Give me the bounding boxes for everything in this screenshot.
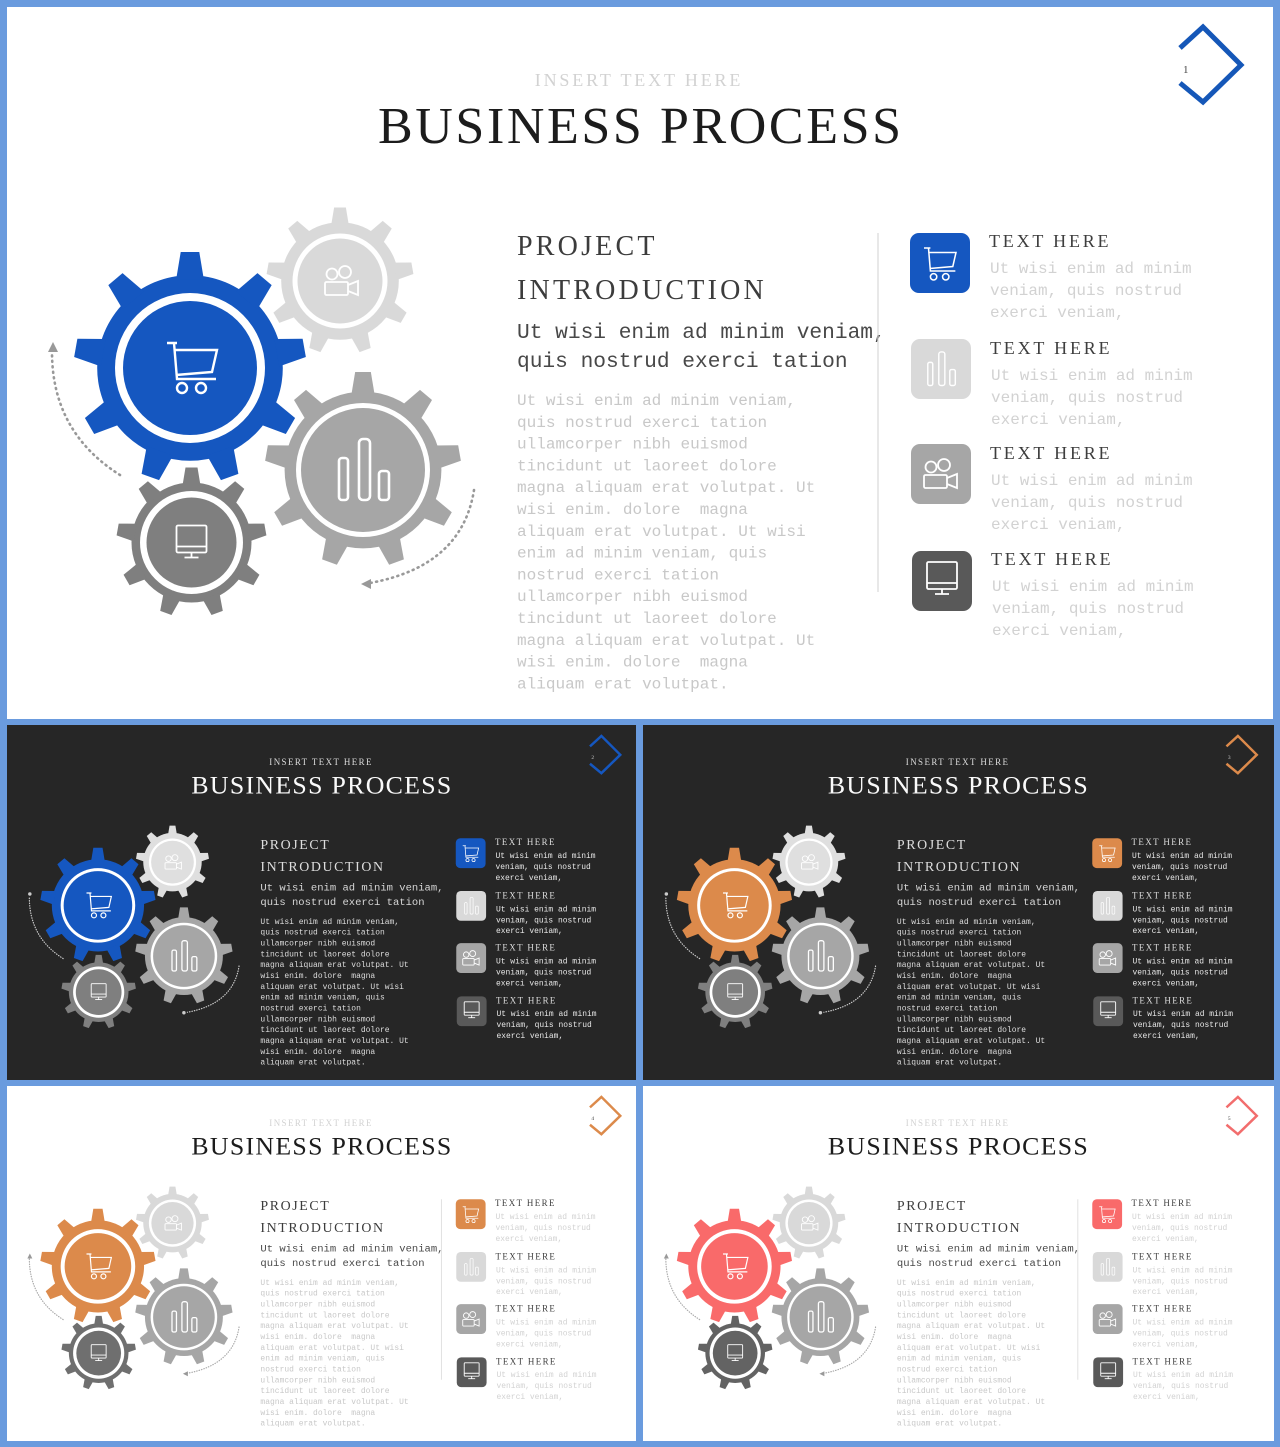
page number badge: [590, 736, 620, 773]
body text: ullamcorper nibh euismod: [517, 588, 748, 606]
list item 3: TEXT HERE: [1132, 1304, 1193, 1314]
list item 2: Ut wisi enim ad minim: [496, 1266, 596, 1275]
list item 1: Ut wisi enim ad minim: [496, 852, 596, 861]
body text: aliquam erat volutpat. Ut wisi: [260, 983, 404, 992]
list item 3: veniam, quis nostrud: [1133, 968, 1228, 977]
list item 2: Ut wisi enim ad minim: [496, 905, 596, 914]
gear: cart: [676, 1209, 792, 1323]
list item 4: TEXT HERE: [496, 995, 557, 1005]
list item 2: [456, 1251, 596, 1297]
list item 2: TEXT HERE: [496, 1251, 556, 1261]
body text: ullamcorper nibh euismod: [897, 1300, 1012, 1309]
body text: quis nostrud exerci tation: [897, 929, 1021, 938]
list item 1: [1092, 837, 1232, 883]
heading: project introduction: PROJECT: [897, 838, 967, 853]
gear: cart: [676, 848, 792, 962]
body text: enim ad minim veniam, quis: [897, 994, 1021, 1003]
list item 2: exerci veniam,: [1133, 1288, 1199, 1297]
list item 4: veniam, quis nostrud: [992, 600, 1184, 618]
list item 1: veniam, quis nostrud: [1132, 863, 1228, 872]
page number badge: 3: [1228, 755, 1231, 761]
body text: magna aliquam erat volutpat. Ut: [260, 1037, 409, 1046]
list item 2: veniam, quis nostrud: [991, 389, 1183, 407]
gear: monitor: [698, 1316, 773, 1390]
list item 1: veniam, quis nostrud: [1132, 1224, 1228, 1233]
arrow: left dotted: [48, 342, 120, 475]
list item 2: TEXT HERE: [1132, 1251, 1193, 1261]
body text: tincidunt ut laoreet dolore: [897, 1026, 1026, 1035]
list item 1: exerci veniam,: [1132, 1235, 1199, 1244]
list item 2: exerci veniam,: [496, 927, 563, 936]
list item 2: veniam, quis nostrud: [496, 916, 592, 925]
list item 4: exerci veniam,: [497, 1032, 563, 1041]
body text: wisi enim. dolore magna: [260, 1333, 375, 1342]
list item 4: TEXT HERE: [991, 549, 1113, 569]
list item 1: veniam, quis nostrud: [990, 282, 1182, 300]
body text: wisi enim. dolore magna: [897, 972, 1012, 981]
body text: enim ad minim veniam, quis: [260, 1355, 385, 1364]
body text: wisi enim. dolore magna: [517, 501, 748, 519]
title: BUSINESS PROCESS: [191, 771, 451, 800]
gear: chart: [135, 907, 233, 1004]
lead text: Ut wisi enim ad minim veniam,: [260, 882, 443, 894]
lead text: Ut wisi enim ad minim veniam,: [260, 1243, 443, 1255]
list item 2: [1093, 1251, 1233, 1297]
title: BUSINESS PROCESS: [378, 98, 901, 155]
list item 1: Ut wisi enim ad minim: [990, 260, 1192, 278]
body text: tincidunt ut laoreet dolore: [260, 1026, 390, 1035]
body text: tincidunt ut laoreet dolore: [897, 1387, 1026, 1396]
gear: camera: [266, 208, 414, 353]
heading: project introduction: INTRODUCTION: [260, 860, 385, 875]
body text: nostrud exerci tation: [517, 566, 719, 584]
gear: chart: [135, 1268, 233, 1365]
list item 4: Ut wisi enim ad minim: [1133, 1371, 1233, 1380]
gear: monitor: [61, 955, 136, 1029]
subtitle: INSERT TEXT HERE: [269, 1118, 373, 1128]
gear: camera: [136, 826, 209, 898]
body text: ullamcorper nibh euismod: [897, 1376, 1012, 1385]
list item 2: exerci veniam,: [496, 1288, 563, 1297]
lead text: quis nostrud exerci tation: [897, 897, 1061, 909]
body text: magna aliquam erat volutpat. Ut: [260, 961, 409, 970]
list item 2: veniam, quis nostrud: [1133, 916, 1228, 925]
list item 3: TEXT HERE: [496, 943, 556, 953]
gear: camera: [772, 826, 846, 898]
page number badge: 4: [591, 1116, 594, 1122]
arrow: left dotted: [27, 1253, 63, 1320]
body text: wisi enim. dolore magna: [897, 1409, 1012, 1418]
heading: project introduction: PROJECT: [260, 1199, 330, 1214]
body text: aliquam erat volutpat. Ut wisi: [517, 523, 806, 541]
list item 2: [911, 338, 1193, 429]
list item 4: Ut wisi enim ad minim: [1133, 1010, 1233, 1019]
subtitle: INSERT TEXT HERE: [269, 757, 373, 767]
body text: aliquam erat volutpat. Ut wisi: [897, 983, 1041, 992]
body text: magna aliquam erat volutpat. Ut: [897, 1037, 1045, 1046]
body text: tincidunt ut laoreet dolore: [897, 950, 1026, 959]
body text: nostrud exerci tation: [260, 1004, 361, 1013]
arrow: right dotted: [183, 1327, 239, 1376]
list item 4: exerci veniam,: [497, 1393, 563, 1402]
lead text: quis nostrud exerci tation: [897, 1258, 1061, 1270]
subtitle: INSERT TEXT HERE: [535, 70, 743, 90]
list item 3: Ut wisi enim ad minim: [991, 472, 1193, 490]
body text: magna aliquam erat volutpat. Ut: [260, 1398, 409, 1407]
heading: project introduction: PROJECT: [260, 838, 330, 853]
list item 4: [912, 549, 1194, 640]
page number badge: 1: [1183, 64, 1188, 76]
body text: quis nostrud exerci tation: [260, 1290, 385, 1299]
body text: ullamcorper nibh euismod: [260, 1376, 375, 1385]
body text: Ut wisi enim ad minim veniam,: [897, 1279, 1036, 1288]
list item 3: veniam, quis nostrud: [496, 1329, 592, 1338]
list item 4: exerci veniam,: [1133, 1032, 1200, 1041]
list item 1: TEXT HERE: [989, 231, 1111, 251]
body text: wisi enim. dolore magna: [897, 1048, 1012, 1057]
gear: camera: [772, 1187, 846, 1259]
heading: project introduction: INTRODUCTION: [517, 275, 767, 306]
list item 1: [910, 231, 1192, 322]
gear: cart: [40, 1209, 156, 1323]
list item 1: Ut wisi enim ad minim: [1132, 1213, 1232, 1222]
body text: ullamcorper nibh euismod: [260, 939, 375, 948]
gear: chart: [771, 1268, 869, 1365]
heading: project introduction: PROJECT: [897, 1199, 967, 1214]
list item 1: TEXT HERE: [495, 837, 556, 847]
page number badge: [1180, 27, 1241, 102]
lead text: Ut wisi enim ad minim veniam,: [897, 1243, 1080, 1255]
list item 3: veniam, quis nostrud: [1133, 1329, 1228, 1338]
body text: wisi enim. dolore magna: [517, 654, 748, 672]
body text: tincidunt ut laoreet dolore: [260, 950, 390, 959]
title: BUSINESS PROCESS: [828, 771, 1088, 800]
title: BUSINESS PROCESS: [191, 1132, 451, 1161]
body text: aliquam erat volutpat.: [897, 1059, 1002, 1068]
list item 4: veniam, quis nostrud: [497, 1021, 592, 1030]
heading: project introduction: INTRODUCTION: [260, 1221, 385, 1236]
list item 2: veniam, quis nostrud: [1133, 1277, 1228, 1286]
page number badge: 5: [1228, 1116, 1231, 1122]
list item 3: Ut wisi enim ad minim: [496, 958, 596, 967]
list item 4: [1093, 995, 1233, 1041]
list item 2: [1093, 890, 1233, 936]
list item 1: exerci veniam,: [1132, 874, 1199, 883]
body text: tincidunt ut laoreet dolore: [897, 1311, 1026, 1320]
list item 2: TEXT HERE: [1132, 890, 1193, 900]
arrow: left dotted: [665, 892, 700, 959]
list item 3: veniam, quis nostrud: [496, 968, 592, 977]
list item 2: exerci veniam,: [991, 411, 1125, 429]
panel: slide 4 light orange: [7, 1086, 636, 1441]
body text: ullamcorper nibh euismod: [260, 1300, 375, 1309]
list item 1: Ut wisi enim ad minim: [496, 1213, 596, 1222]
list item 3: Ut wisi enim ad minim: [1133, 958, 1233, 967]
body text: magna aliquam erat volutpat. Ut: [897, 1398, 1045, 1407]
page number badge: [1226, 736, 1257, 773]
list item 3: exerci veniam,: [1133, 979, 1199, 988]
body text: ullamcorper nibh euismod: [897, 1015, 1012, 1024]
gear: monitor: [61, 1316, 136, 1390]
page number badge: 2: [591, 755, 594, 761]
gear: camera: [136, 1187, 209, 1259]
body text: tincidunt ut laoreet dolore: [260, 1311, 390, 1320]
body text: aliquam erat volutpat.: [260, 1420, 366, 1429]
body text: Ut wisi enim ad minim veniam,: [897, 918, 1036, 927]
heading: project introduction: INTRODUCTION: [897, 860, 1021, 875]
list item 4: TEXT HERE: [1133, 995, 1193, 1005]
body text: nostrud exerci tation: [897, 1365, 998, 1374]
body text: wisi enim. dolore magna: [260, 1409, 375, 1418]
gear: chart: [264, 372, 462, 566]
list item 2: TEXT HERE: [990, 338, 1112, 358]
lead text: quis nostrud exerci tation: [260, 1258, 425, 1270]
title: BUSINESS PROCESS: [828, 1132, 1088, 1161]
body text: magna aliquam erat volutpat. Ut: [517, 632, 815, 650]
list item 2: veniam, quis nostrud: [496, 1277, 592, 1286]
body text: Ut wisi enim ad minim veniam,: [517, 392, 796, 410]
body text: nostrud exerci tation: [260, 1365, 361, 1374]
arrow: right dotted: [361, 490, 474, 589]
body text: tincidunt ut laoreet dolore: [260, 1387, 390, 1396]
list item 3: exerci veniam,: [496, 979, 563, 988]
list item 3: TEXT HERE: [1132, 943, 1193, 953]
arrow: left dotted: [28, 892, 63, 959]
body text: tincidunt ut laoreet dolore: [517, 610, 777, 628]
page number badge: [1226, 1097, 1257, 1134]
list item 4: Ut wisi enim ad minim: [992, 578, 1194, 596]
lead text: quis nostrud exerci tation: [260, 897, 425, 909]
gear: cart: [40, 848, 156, 962]
list item 3: Ut wisi enim ad minim: [1133, 1319, 1233, 1328]
heading: project introduction: INTRODUCTION: [897, 1221, 1021, 1236]
body text: aliquam erat volutpat.: [897, 1420, 1002, 1429]
list item 3: exerci veniam,: [991, 516, 1125, 534]
subtitle: INSERT TEXT HERE: [906, 1118, 1009, 1128]
body text: wisi enim. dolore magna: [260, 1048, 375, 1057]
list item 4: exerci veniam,: [992, 622, 1126, 640]
list item 3: [1093, 943, 1233, 988]
body text: enim ad minim veniam, quis: [897, 1355, 1021, 1364]
list item 3: exerci veniam,: [496, 1340, 563, 1349]
list item 4: TEXT HERE: [1133, 1356, 1193, 1366]
heading: project introduction: PROJECT: [517, 231, 658, 262]
list item 4: TEXT HERE: [496, 1356, 557, 1366]
list item 1: veniam, quis nostrud: [496, 863, 591, 872]
body text: ullamcorper nibh euismod: [517, 436, 748, 454]
panel: slide 2 dark blue: [7, 725, 636, 1080]
body text: nostrud exerci tation: [897, 1004, 998, 1013]
list item 4: veniam, quis nostrud: [497, 1382, 592, 1391]
body text: Ut wisi enim ad minim veniam,: [260, 918, 399, 927]
list item 1: TEXT HERE: [1132, 837, 1192, 847]
gear: chart: [771, 907, 869, 1004]
list item 3: [1093, 1304, 1233, 1349]
lead text: Ut wisi enim ad minim veniam,: [517, 321, 886, 345]
body text: quis nostrud exerci tation: [517, 414, 767, 432]
list item 3: TEXT HERE: [496, 1304, 556, 1314]
body text: tincidunt ut laoreet dolore: [517, 457, 777, 475]
body text: ullamcorper nibh euismod: [897, 939, 1012, 948]
gear: monitor: [116, 468, 267, 616]
list item 3: [911, 443, 1193, 534]
body text: magna aliquam erat volutpat. Ut: [260, 1322, 409, 1331]
body text: aliquam erat volutpat. Ut wisi: [897, 1344, 1041, 1353]
gear: cart: [73, 252, 307, 482]
list item 1: [1092, 1198, 1232, 1244]
list item 1: [456, 1198, 596, 1244]
body text: magna aliquam erat volutpat. Ut: [517, 479, 815, 497]
body text: enim ad minim veniam, quis: [260, 994, 385, 1003]
list item 4: [457, 995, 597, 1041]
body text: magna aliquam erat volutpat. Ut: [897, 961, 1045, 970]
list item 4: [457, 1356, 597, 1402]
page number badge: [590, 1097, 620, 1134]
list item 2: TEXT HERE: [496, 890, 556, 900]
body text: enim ad minim veniam, quis: [517, 545, 767, 563]
body text: Ut wisi enim ad minim veniam,: [260, 1279, 399, 1288]
list item 3: exerci veniam,: [1133, 1340, 1199, 1349]
list item 1: exerci veniam,: [990, 304, 1124, 322]
arrow: right dotted: [819, 1327, 876, 1376]
list item 4: exerci veniam,: [1133, 1393, 1200, 1402]
list item 1: TEXT HERE: [495, 1198, 556, 1208]
list item 4: veniam, quis nostrud: [1133, 1382, 1229, 1391]
list item 4: [1093, 1356, 1233, 1402]
list item 1: exerci veniam,: [496, 1235, 562, 1244]
body text: ullamcorper nibh euismod: [260, 1015, 375, 1024]
lead text: quis nostrud exerci tation: [517, 350, 848, 374]
list item 4: Ut wisi enim ad minim: [497, 1371, 597, 1380]
arrow: left dotted: [664, 1253, 700, 1320]
list item 4: Ut wisi enim ad minim: [497, 1010, 597, 1019]
list item 2: exerci veniam,: [1133, 927, 1199, 936]
list item 2: Ut wisi enim ad minim: [991, 367, 1193, 385]
subtitle: INSERT TEXT HERE: [906, 757, 1009, 767]
body text: wisi enim. dolore magna: [260, 972, 375, 981]
list item 3: Ut wisi enim ad minim: [496, 1319, 596, 1328]
body text: quis nostrud exerci tation: [260, 929, 385, 938]
list item 3: veniam, quis nostrud: [991, 494, 1183, 512]
list item 1: Ut wisi enim ad minim: [1132, 852, 1232, 861]
body text: quis nostrud exerci tation: [897, 1290, 1021, 1299]
body text: magna aliquam erat volutpat. Ut: [897, 1322, 1045, 1331]
list item 1: [456, 837, 596, 883]
list item 2: [456, 890, 596, 936]
list item 3: [456, 1304, 596, 1349]
list item 1: veniam, quis nostrud: [496, 1224, 591, 1233]
list item 1: exerci veniam,: [496, 874, 562, 883]
gear: monitor: [698, 955, 773, 1029]
body text: aliquam erat volutpat.: [260, 1059, 366, 1068]
arrow: right dotted: [182, 966, 239, 1014]
list item 4: veniam, quis nostrud: [1133, 1021, 1229, 1030]
arrow: right dotted: [819, 966, 876, 1014]
list item 3: TEXT HERE: [990, 443, 1112, 463]
lead text: Ut wisi enim ad minim veniam,: [897, 882, 1080, 894]
list item 2: Ut wisi enim ad minim: [1133, 1266, 1233, 1275]
body text: aliquam erat volutpat.: [517, 675, 729, 693]
list item 1: TEXT HERE: [1132, 1198, 1192, 1208]
list item 3: [456, 943, 596, 988]
body text: aliquam erat volutpat. Ut wisi: [260, 1344, 404, 1353]
body text: wisi enim. dolore magna: [897, 1333, 1012, 1342]
panel: slide 5 light coral: [643, 1086, 1274, 1441]
panel: slide 3 dark orange: [643, 725, 1274, 1080]
list item 2: Ut wisi enim ad minim: [1133, 905, 1233, 914]
panel: slide 1 large light: [7, 7, 1273, 719]
